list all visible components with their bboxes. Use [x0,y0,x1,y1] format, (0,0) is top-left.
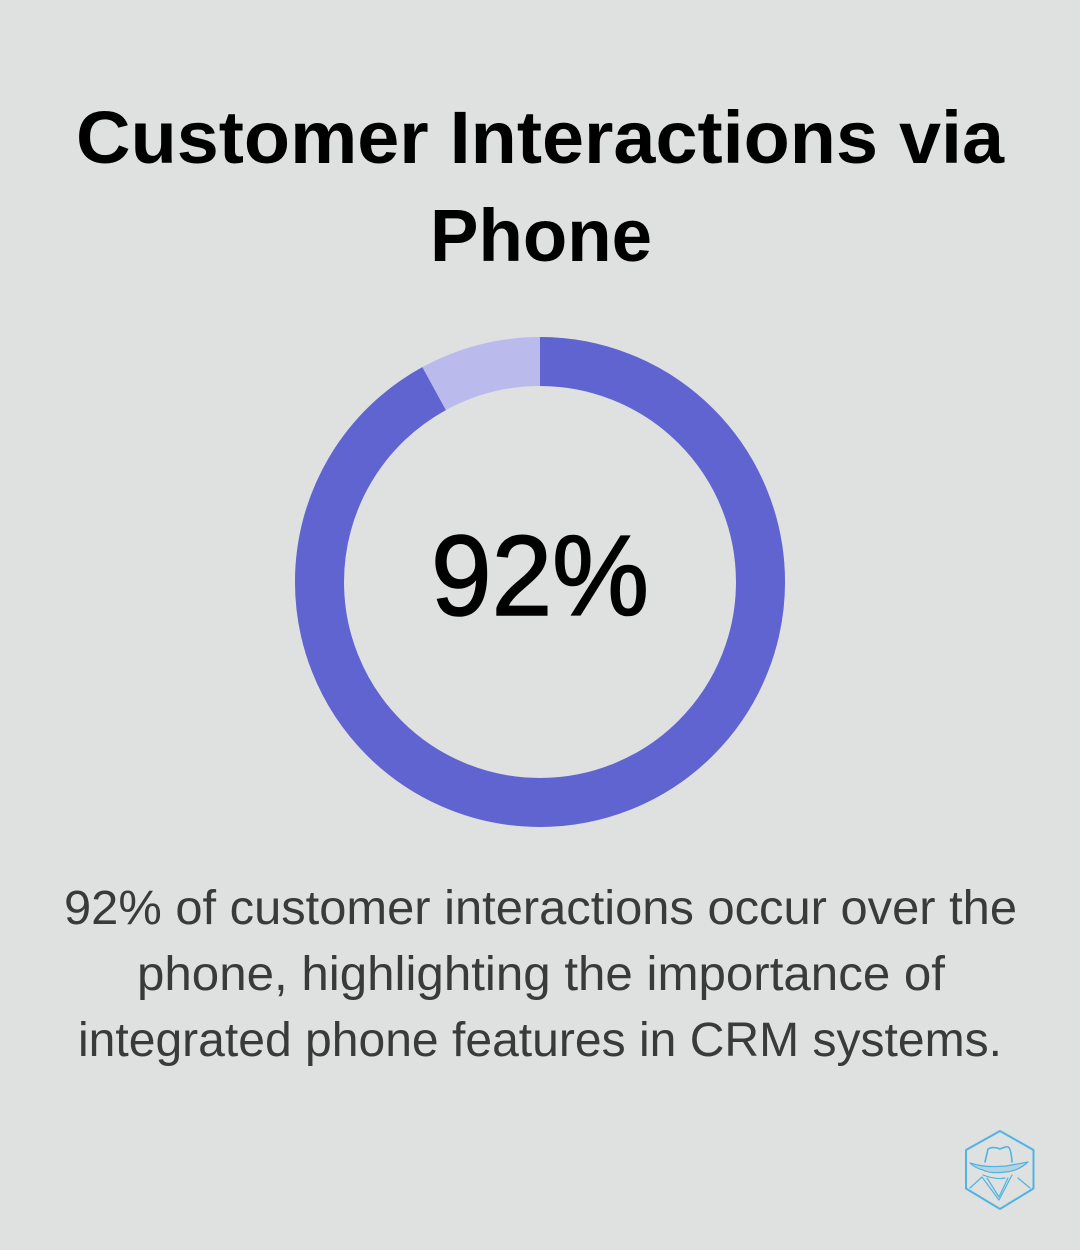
icon: hexagon spy logo [966,1131,1034,1209]
donut center value: 92% [431,513,649,640]
description text: integrated phone features in CRM systems. [78,1014,1002,1067]
title: Customer Interactions via [76,96,1005,179]
donut chart: 92% [320,362,760,802]
description text: phone, highlighting the importance of [137,948,946,1001]
description text [64,882,1017,1067]
description text: 92% of customer interactions occur over the [64,882,1017,935]
title: Phone [430,194,652,277]
title [76,96,1005,277]
